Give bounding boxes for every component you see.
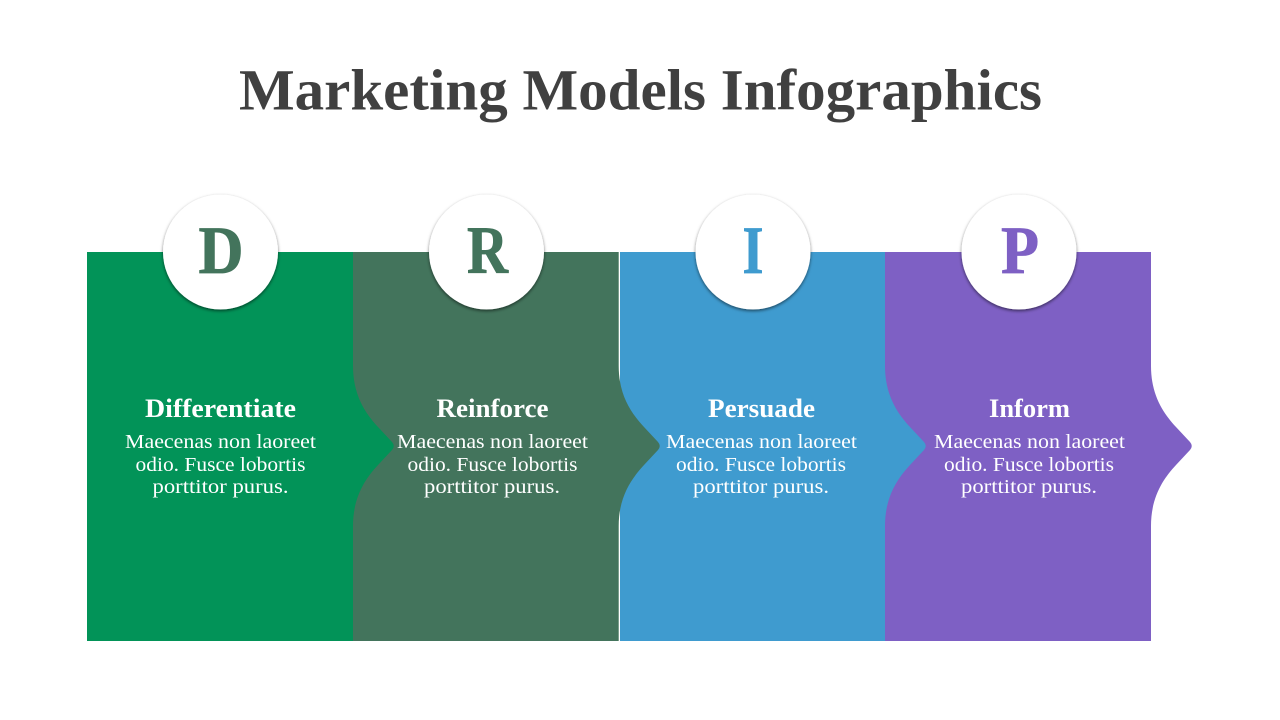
icon: letter R badge: R <box>467 212 509 288</box>
panel: inform arrow <box>885 252 1192 641</box>
icon: letter I badge <box>696 194 810 310</box>
text: reinforce: odio. Fusce lobortis <box>408 454 578 476</box>
text: persuade <box>666 394 857 498</box>
text: inform: Maecenas non laoreet <box>934 431 1125 453</box>
text: reinforce: porttitor purus. <box>424 476 560 498</box>
text: persuade: Maecenas non laoreet <box>666 431 857 453</box>
panel: reinforce arrow <box>353 252 660 641</box>
icon: letter P badge <box>962 194 1076 310</box>
text: persuade: Persuade <box>708 394 815 423</box>
text: differentiate: porttitor purus. <box>152 476 288 498</box>
icon: letter I badge: I <box>742 212 764 288</box>
text: differentiate: Differentiate <box>145 394 296 423</box>
text: differentiate <box>125 394 316 498</box>
text: reinforce: Reinforce <box>436 394 548 423</box>
icon: letter P badge: P <box>1001 212 1039 288</box>
icon: letter R badge <box>429 194 544 310</box>
text: persuade: odio. Fusce lobortis <box>676 454 846 476</box>
text: persuade: porttitor purus. <box>693 476 829 498</box>
text: inform: odio. Fusce lobortis <box>944 454 1114 476</box>
title: Marketing Models Infographics <box>239 58 1042 122</box>
text: inform: Inform <box>989 394 1070 423</box>
text: differentiate: Maecenas non laoreet <box>125 431 316 453</box>
icon: letter D badge <box>163 194 278 310</box>
text: reinforce <box>397 394 588 498</box>
panel: differentiate arrow <box>87 252 394 641</box>
text: inform <box>934 394 1125 498</box>
text: differentiate: odio. Fusce lobortis <box>136 454 306 476</box>
text: reinforce: Maecenas non laoreet <box>397 431 588 453</box>
text: inform: porttitor purus. <box>961 476 1097 498</box>
icon: letter D badge: D <box>198 212 244 288</box>
panel: persuade arrow <box>620 252 926 641</box>
